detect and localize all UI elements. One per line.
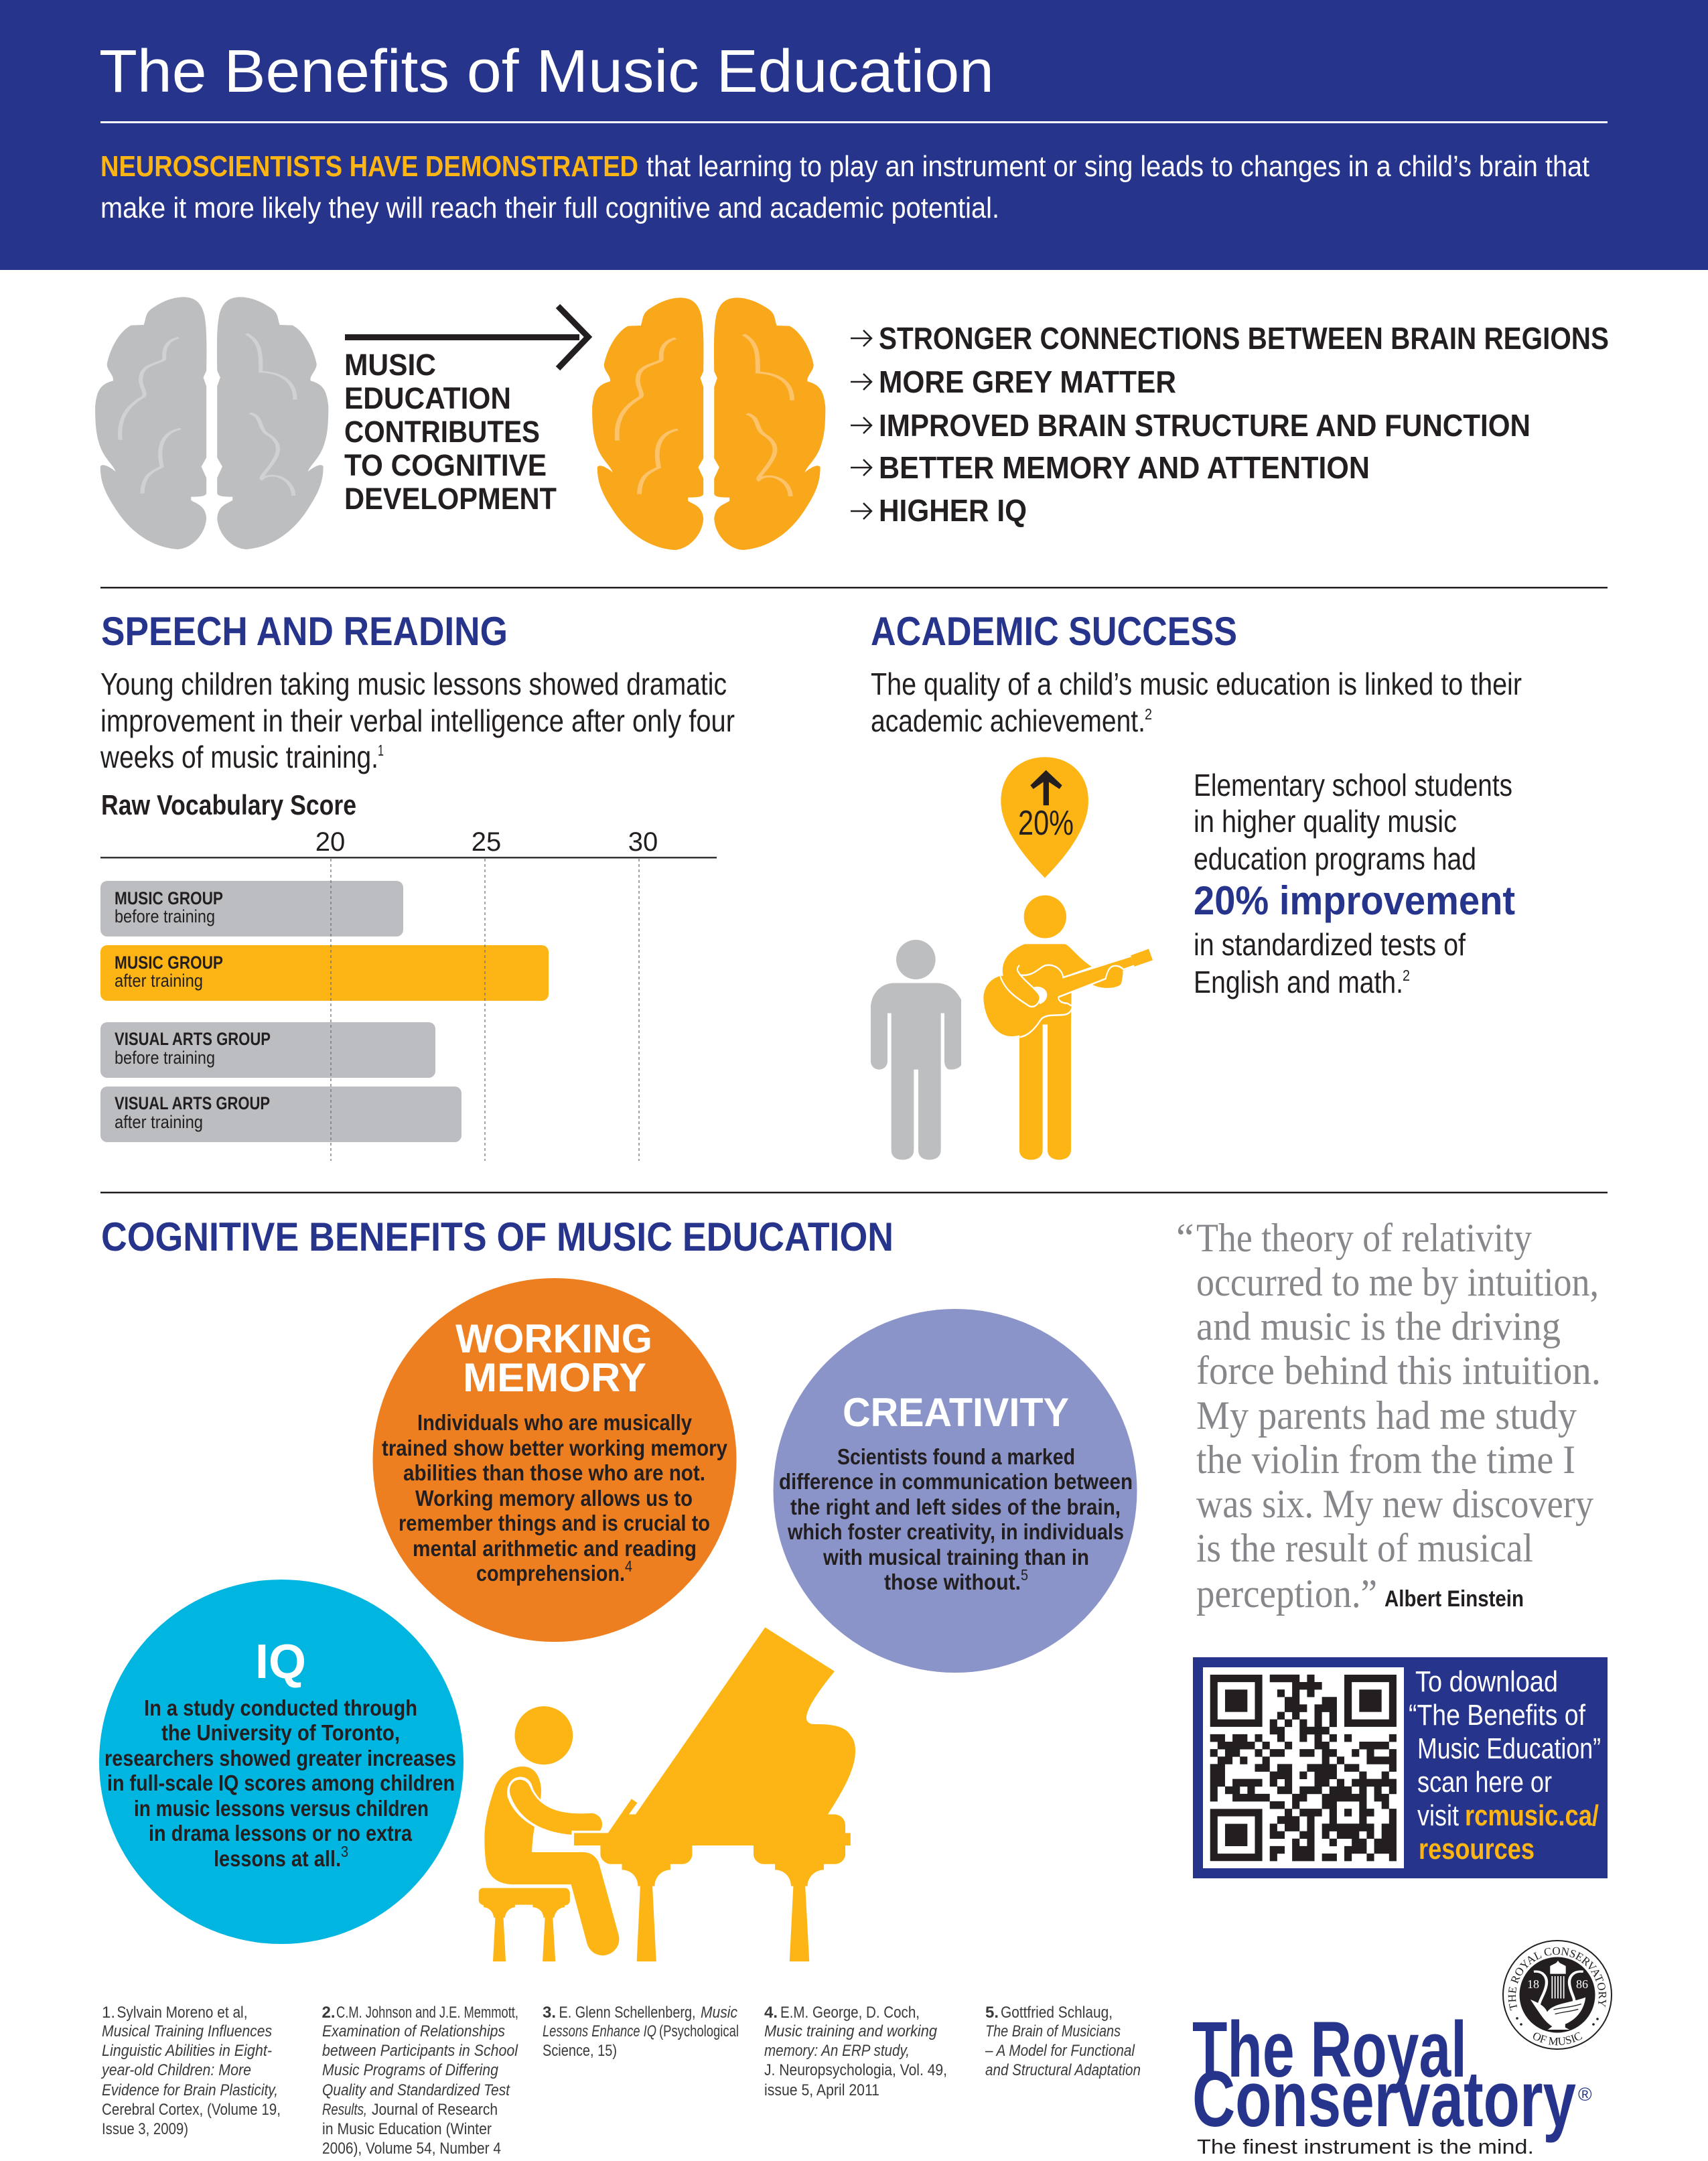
icon: 20% pin: 20% — [1018, 804, 1074, 843]
seal: OF MUSIC — [1533, 2032, 1582, 2046]
text: 20% improvement callout: English and math. — [1194, 965, 1403, 999]
quote: Albert Einstein: The theory of relativity — [1196, 1216, 1532, 1260]
list: brain benefits: BETTER MEMORY AND ATTENTION — [879, 450, 1370, 485]
wordmark: The Royal — [1192, 2006, 1467, 2094]
quote: Albert Einstein: “ — [1176, 1216, 1194, 1260]
text: music education contributes: DEVELOPMENT — [344, 482, 557, 516]
footnote 5: 5. — [985, 2004, 999, 2022]
footnote 1: 1. — [102, 2004, 115, 2022]
bar chart: raw vocabulary score: 25 — [472, 827, 501, 857]
text: download instructions — [1409, 1665, 1601, 1866]
footnote 3: Lessons Enhance IQ — [543, 2022, 656, 2040]
circle: creativity: 5 — [1021, 1566, 1028, 1584]
footnote 1: Sylvain Moreno et al, — [117, 2004, 248, 2022]
icon: guitar player — [983, 896, 1153, 1160]
circle: IQ: in drama lessons or no extra — [149, 1821, 413, 1845]
footnote 5 — [985, 2004, 1141, 2079]
circle: working memory — [372, 1278, 737, 1642]
wordmark: Conservatory — [1192, 2055, 1576, 2144]
circle: creativity — [773, 1309, 1137, 1673]
heading: speech and reading: SPEECH AND READING — [101, 609, 508, 654]
bar chart: raw vocabulary score: 30 — [628, 827, 658, 857]
text: 20% improvement callout: 20% improvement — [1194, 878, 1515, 923]
text: 20% improvement callout: in standardized tests of — [1194, 927, 1466, 962]
bar chart: raw vocabulary score: 20 — [315, 827, 345, 857]
bar: visual arts group after — [100, 1087, 461, 1142]
QR code — [1210, 1675, 1397, 1861]
wordmark — [1192, 2006, 1592, 2144]
footnote 1: year-old Children: More — [100, 2061, 251, 2079]
footnote 1: Evidence for Brain Plasticity, — [102, 2081, 278, 2099]
footnote 4: issue 5, April 2011 — [764, 2081, 879, 2099]
text: download instructions: visit — [1417, 1799, 1459, 1832]
footnote 4: memory: An ERP study, — [764, 2042, 910, 2060]
footnote 5: The Brain of Musicians — [985, 2022, 1121, 2040]
text: speech description: 1 — [378, 742, 384, 759]
circle: working memory: 4 — [625, 1557, 632, 1575]
footnote 3: E. Glenn Schellenberg, — [559, 2004, 695, 2022]
icon: grey brain — [95, 297, 328, 549]
intro text: that learning to play an instrument or sing leads to changes in a child’s brain that — [646, 150, 1589, 183]
circle: working memory: trained show better working memory — [382, 1436, 728, 1460]
bar chart: raw vocabulary score — [100, 789, 717, 1161]
circle: working memory: Working memory allows us to — [415, 1486, 693, 1511]
icon: 20% pin — [1001, 757, 1088, 878]
list: brain benefits: MORE GREY MATTER — [879, 364, 1176, 399]
footnote 2 — [322, 2004, 518, 2158]
title: The Benefits of Music Education — [99, 38, 994, 105]
quote: Albert Einstein: perception.” — [1196, 1572, 1377, 1616]
arrow: music education to brain — [345, 306, 588, 368]
text: download instructions: rcmusic.ca/ — [1465, 1799, 1599, 1832]
circle: working memory: abilities than those who are not. — [403, 1460, 705, 1485]
text: speech description — [100, 667, 735, 774]
icon: grey person — [871, 940, 961, 1160]
footnote 2: Examination of Relationships — [322, 2022, 505, 2040]
footnote 5: – A Model for Functional — [985, 2042, 1135, 2060]
tagline: The finest instrument is the mind. — [1197, 2135, 1534, 2158]
circle: IQ: IQ — [255, 1635, 306, 1689]
footnote 3: 3. — [543, 2004, 556, 2022]
bar: visual arts group after: after training — [115, 1112, 203, 1132]
circle: creativity: the right and left sides of the brain, — [790, 1494, 1121, 1519]
footnote 5: Gottfried Schlaug, — [1001, 2004, 1113, 2022]
intro text: NEUROSCIENTISTS HAVE DEMONSTRATED — [100, 150, 638, 183]
footnote 3: Music — [701, 2004, 737, 2022]
circle: IQ: in music lessons versus children — [134, 1796, 429, 1821]
footnote 1: Musical Training Influences — [102, 2022, 272, 2040]
bar: music group before: before training — [115, 906, 215, 926]
quote: Albert Einstein: is the result of musical — [1196, 1526, 1533, 1570]
bar: visual arts group after: VISUAL ARTS GROUP — [115, 1093, 270, 1113]
intro text: make it more likely they will reach their full cognitive and academic potential. — [100, 192, 999, 224]
text: 20% improvement callout: Elementary school students — [1194, 768, 1512, 803]
quote: Albert Einstein: My parents had me study — [1196, 1393, 1577, 1438]
bar: visual arts group before: VISUAL ARTS GROUP — [115, 1029, 271, 1049]
quote: Albert Einstein: and music is the driving — [1196, 1304, 1561, 1348]
text: academic description: 2 — [1145, 705, 1152, 723]
bar: music group before — [100, 881, 403, 936]
circle: creativity: difference in communication between — [779, 1469, 1133, 1494]
footnote 1 — [100, 2004, 281, 2138]
circle: IQ: in full-scale IQ scores among children — [107, 1770, 455, 1795]
footnote 1: Linguistic Abilities in Eight- — [102, 2042, 272, 2060]
circle: working memory: remember things and is crucial to — [399, 1511, 710, 1535]
circle: creativity: with musical training than in — [823, 1545, 1089, 1570]
circle: working memory: comprehension. — [476, 1561, 625, 1586]
footnote 5: and Structural Adaptation — [985, 2061, 1141, 2079]
footnote 4: E.M. George, D. Coch, — [780, 2004, 920, 2022]
seal — [1502, 1940, 1612, 2050]
bar: visual arts group before: before training — [115, 1048, 215, 1068]
circle: creativity: which foster creativity, in individuals — [787, 1519, 1124, 1544]
text: academic description: The quality of a child’s music education is linked to their — [871, 667, 1522, 701]
text: download instructions: resources — [1419, 1833, 1535, 1866]
circle: creativity: those without. — [884, 1570, 1021, 1594]
footnote 4: Music training and working — [764, 2022, 938, 2040]
text: academic description: academic achievement. — [871, 703, 1145, 738]
bar: music group before: MUSIC GROUP — [115, 888, 223, 908]
list: brain benefits: HIGHER IQ — [879, 493, 1027, 528]
circle: working memory: MEMORY — [463, 1355, 646, 1400]
circle: creativity: CREATIVITY — [843, 1390, 1069, 1435]
footnote 2: C.M. Johnson and J.E. Memmott, — [336, 2004, 518, 2022]
footnote 2: between Participants in School — [322, 2042, 518, 2060]
footnote 2: 2006), Volume 54, Number 4 — [322, 2140, 501, 2158]
quote: Albert Einstein: Albert Einstein — [1384, 1586, 1524, 1612]
text: academic description — [871, 667, 1522, 738]
footnote 4: 4. — [764, 2004, 778, 2022]
footnote 4: J. Neuropsychologia, Vol. 49, — [764, 2061, 947, 2079]
text: music education contributes: CONTRIBUTES — [344, 415, 540, 449]
quote: Albert Einstein: was six. My new discovery — [1196, 1482, 1593, 1526]
circle: IQ — [99, 1580, 464, 1944]
panel: academic success — [871, 609, 1522, 1160]
text: speech description: improvement in their verbal intelligence after only four — [100, 703, 735, 738]
icon: orange brain — [592, 297, 825, 550]
circle: working memory: mental arithmetic and reading — [413, 1536, 697, 1561]
footnote 4 — [764, 2004, 947, 2099]
circle: IQ: 3 — [341, 1843, 348, 1860]
seal: THE ROYAL CONSERVATORY — [1508, 1947, 1606, 2011]
footnote 2: Music Programs of Differing — [322, 2061, 499, 2079]
footnote 2: in Music Education (Winter — [322, 2120, 492, 2138]
intro text — [100, 150, 1589, 224]
footnote 2: Results, — [322, 2101, 367, 2119]
footnote 3: Science, 15) — [543, 2042, 617, 2060]
bar: visual arts group before — [100, 1022, 435, 1078]
circle: IQ: the University of Toronto, — [161, 1720, 400, 1745]
footnote 2: 2. — [322, 2004, 336, 2022]
footnotes — [100, 2004, 1141, 2158]
text: 20% improvement callout: education programs had — [1194, 841, 1476, 876]
panel: brain comparison — [95, 297, 1609, 550]
text: 20% improvement callout — [1194, 768, 1515, 999]
circle: working memory: WORKING — [455, 1316, 652, 1361]
text: speech description: weeks of music training. — [100, 740, 378, 774]
heading: cognitive benefits: COGNITIVE BENEFITS OF MUSIC EDUCATION — [101, 1214, 894, 1259]
footnote 3 — [543, 2004, 739, 2060]
text: 20% improvement callout: in higher quality music — [1194, 804, 1457, 839]
text: download instructions: “The Benefits of — [1409, 1699, 1586, 1732]
seal: 18 — [1527, 1977, 1539, 1991]
text: music education contributes — [344, 348, 557, 516]
quote: Albert Einstein — [1176, 1216, 1601, 1616]
footnote 2: Quality and Standardized Test — [322, 2081, 510, 2099]
footnote 1: Issue 3, 2009) — [102, 2120, 188, 2138]
quote: Albert Einstein: occurred to me by intuition, — [1196, 1260, 1599, 1304]
bar: music group after — [100, 945, 549, 1001]
text: speech description: Young children taking music lessons showed dramatic — [100, 667, 727, 701]
panel: QR download — [1193, 1657, 1608, 1878]
circle: IQ: researchers showed greater increases — [104, 1746, 456, 1770]
bar chart: raw vocabulary score: Raw Vocabulary Score — [101, 789, 356, 821]
circle: working memory: Individuals who are musically — [417, 1410, 693, 1435]
circle: IQ: In a study conducted through — [144, 1695, 417, 1720]
text: music education contributes: TO COGNITIVE — [344, 448, 547, 482]
text: music education contributes: MUSIC — [344, 348, 436, 382]
heading: academic success: ACADEMIC SUCCESS — [871, 609, 1237, 654]
text: download instructions: To download — [1415, 1665, 1558, 1698]
logo: The Royal Conservatory — [1192, 1940, 1612, 2158]
footnote 1: Cerebral Cortex, (Volume 19, — [102, 2101, 281, 2119]
text: download instructions: scan here or — [1417, 1766, 1552, 1799]
list: brain benefits: IMPROVED BRAIN STRUCTURE AND FUNCTION — [879, 408, 1531, 443]
wordmark: ® — [1578, 2084, 1592, 2105]
footnote 2: Journal of Research — [372, 2101, 498, 2119]
panel: speech and reading — [100, 609, 735, 1161]
circle: IQ: lessons at all. — [214, 1846, 341, 1871]
list: brain benefits — [851, 321, 1609, 528]
icon: piano and pianist — [479, 1627, 855, 1961]
footnote 3: (Psychological — [659, 2022, 739, 2040]
bar: music group after: after training — [115, 971, 203, 991]
text: music education contributes: EDUCATION — [344, 381, 511, 415]
bar: music group after: MUSIC GROUP — [115, 953, 223, 973]
header banner — [0, 0, 1708, 270]
circle: creativity: Scientists found a marked — [837, 1444, 1075, 1469]
list: brain benefits: STRONGER CONNECTIONS BETWEEN BRAIN REGIONS — [879, 321, 1609, 356]
quote: Albert Einstein: the violin from the time I — [1196, 1438, 1575, 1482]
quote: Albert Einstein: force behind this intuition. — [1196, 1348, 1601, 1393]
seal: 86 — [1576, 1977, 1588, 1991]
text: download instructions: Music Education” — [1417, 1732, 1601, 1765]
text: 20% improvement callout: 2 — [1403, 967, 1410, 984]
